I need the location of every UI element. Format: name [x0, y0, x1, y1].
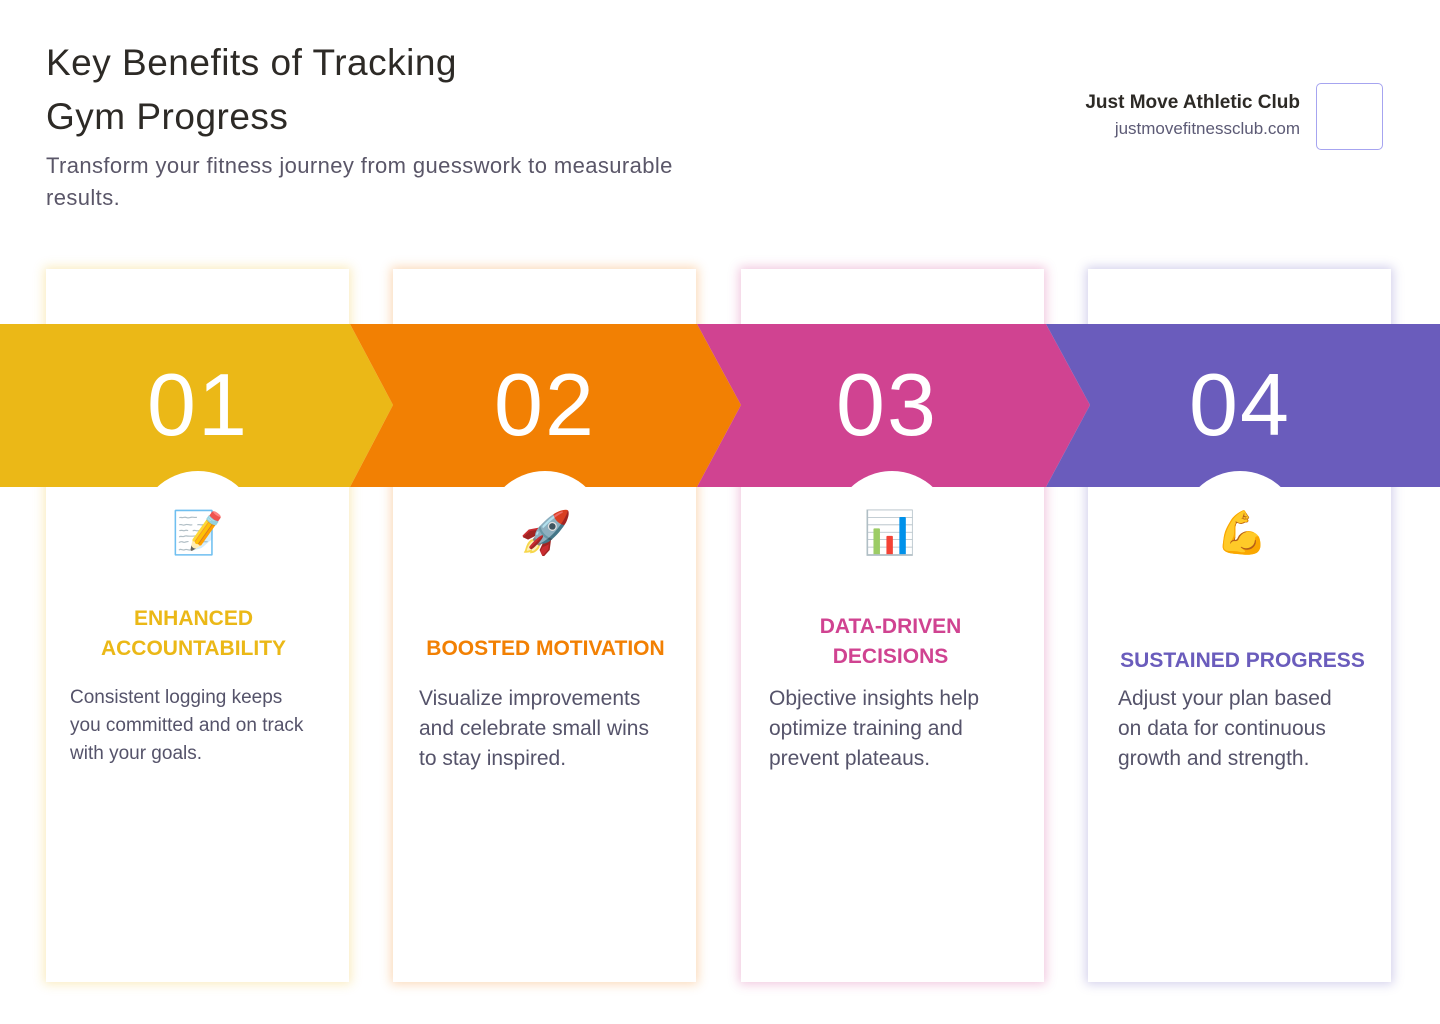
text 1 — [70, 687, 304, 764]
text 2: and celebrate small wins — [419, 717, 649, 740]
heading 3: DATA-DRIVEN — [820, 615, 961, 638]
logo box — [1316, 83, 1383, 150]
card 2 — [393, 269, 696, 982]
text 1: you committed and on track — [70, 715, 303, 736]
arrow banner — [0, 324, 1440, 487]
text 2 — [419, 687, 649, 770]
icon: rocket: 🚀 — [520, 508, 572, 557]
text 3 — [769, 687, 979, 770]
number 03: 03 — [836, 355, 938, 454]
icon: memo: 📝 — [172, 508, 224, 557]
circles — [157, 471, 1280, 487]
subtitle: Transform your fitness journey from guesswork to measurable — [46, 153, 673, 178]
title: Gym Progress — [46, 96, 288, 137]
heading 1: ACCOUNTABILITY — [101, 637, 286, 660]
text 3: prevent plateaus. — [769, 747, 930, 770]
text 4: growth and strength. — [1118, 747, 1309, 770]
heading 3 — [820, 615, 961, 668]
heading 2: BOOSTED MOTIVATION — [426, 637, 665, 660]
heading 3: DECISIONS — [833, 645, 948, 668]
title — [46, 42, 457, 137]
number 02: 02 — [494, 355, 596, 454]
card 4 — [1088, 269, 1391, 982]
text 2: to stay inspired. — [419, 747, 566, 770]
heading 1 — [101, 607, 286, 660]
text 4: Adjust your plan based — [1118, 687, 1332, 710]
heading 1: ENHANCED — [134, 607, 253, 630]
number 04: 04 — [1189, 355, 1291, 454]
text 4 — [1118, 687, 1332, 770]
text 1: with your goals. — [70, 743, 202, 764]
brand text: Just Move Athletic Club — [1085, 92, 1300, 113]
text 4: on data for continuous — [1118, 717, 1326, 740]
brand text — [1085, 92, 1300, 138]
text 3: Objective insights help — [769, 687, 979, 710]
card 1 — [46, 269, 349, 982]
text 2: Visualize improvements — [419, 687, 640, 710]
icon: chart: 📊 — [864, 508, 916, 557]
heading 4: SUSTAINED PROGRESS — [1120, 649, 1365, 672]
text 1: Consistent logging keeps — [70, 687, 282, 708]
subtitle — [46, 153, 673, 210]
title: Key Benefits of Tracking — [46, 42, 457, 83]
card 3 — [741, 269, 1044, 982]
brand text: justmovefitnessclub.com — [1115, 119, 1300, 138]
text 3: optimize training and — [769, 717, 963, 740]
number 01: 01 — [147, 355, 249, 454]
icon: muscle: 💪 — [1216, 508, 1268, 557]
subtitle: results. — [46, 185, 120, 210]
